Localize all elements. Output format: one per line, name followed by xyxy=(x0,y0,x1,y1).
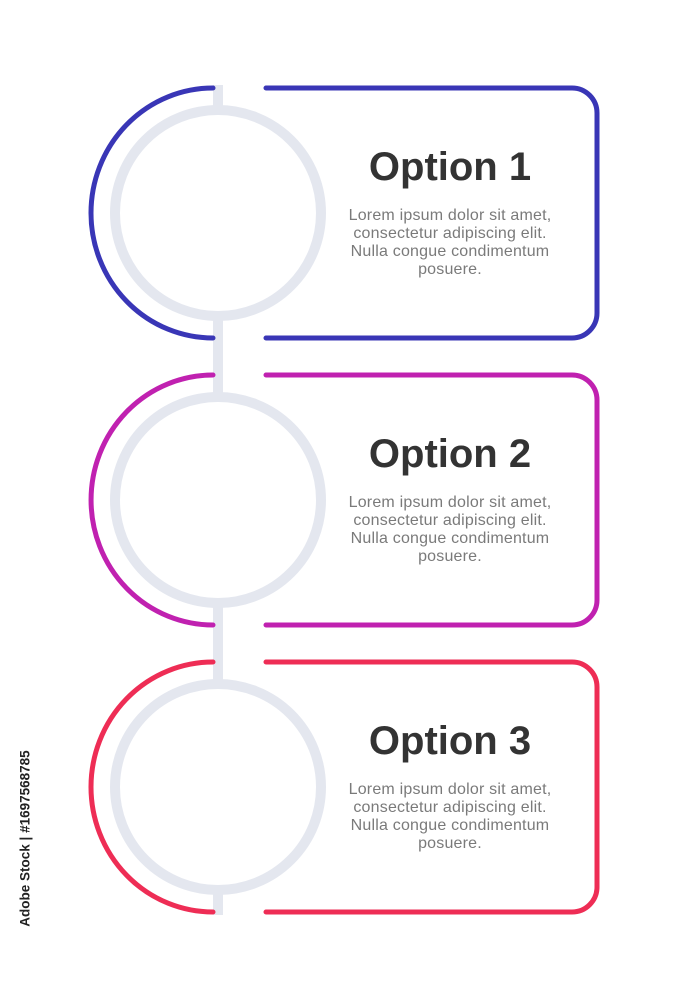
watermark: Adobe Stock | #1697568785 xyxy=(18,750,32,927)
option 1 text: posuere. xyxy=(418,261,482,278)
option 3 text: Nulla congue condimentum xyxy=(351,817,549,834)
connector line xyxy=(213,85,223,915)
option 2 text: Nulla congue condimentum xyxy=(351,530,549,547)
option 1 text: Nulla congue condimentum xyxy=(351,243,549,260)
option 2 text xyxy=(349,494,551,565)
option 2 text: consectetur adipiscing elit. xyxy=(353,512,547,529)
step 3 circle xyxy=(115,684,321,890)
option 3 text: Lorem ipsum dolor sit amet, xyxy=(349,781,551,798)
step 1 circle xyxy=(115,110,321,316)
option 3 title: Option 3 xyxy=(369,719,531,763)
option 2 text: Lorem ipsum dolor sit amet, xyxy=(349,494,551,511)
step 2 frame xyxy=(91,375,597,625)
step 3 frame xyxy=(91,662,597,912)
step 2 circle xyxy=(115,397,321,603)
option 1 title: Option 1 xyxy=(369,145,531,189)
option 3 text: posuere. xyxy=(418,835,482,852)
option 1 text xyxy=(349,207,551,278)
option 3 text xyxy=(349,781,551,852)
option 2 title: Option 2 xyxy=(369,432,531,476)
option 1 text: Lorem ipsum dolor sit amet, xyxy=(349,207,551,224)
option 2 text: posuere. xyxy=(418,548,482,565)
option 3 text: consectetur adipiscing elit. xyxy=(353,799,547,816)
option 1 text: consectetur adipiscing elit. xyxy=(353,225,547,242)
step 1 frame xyxy=(91,88,597,338)
